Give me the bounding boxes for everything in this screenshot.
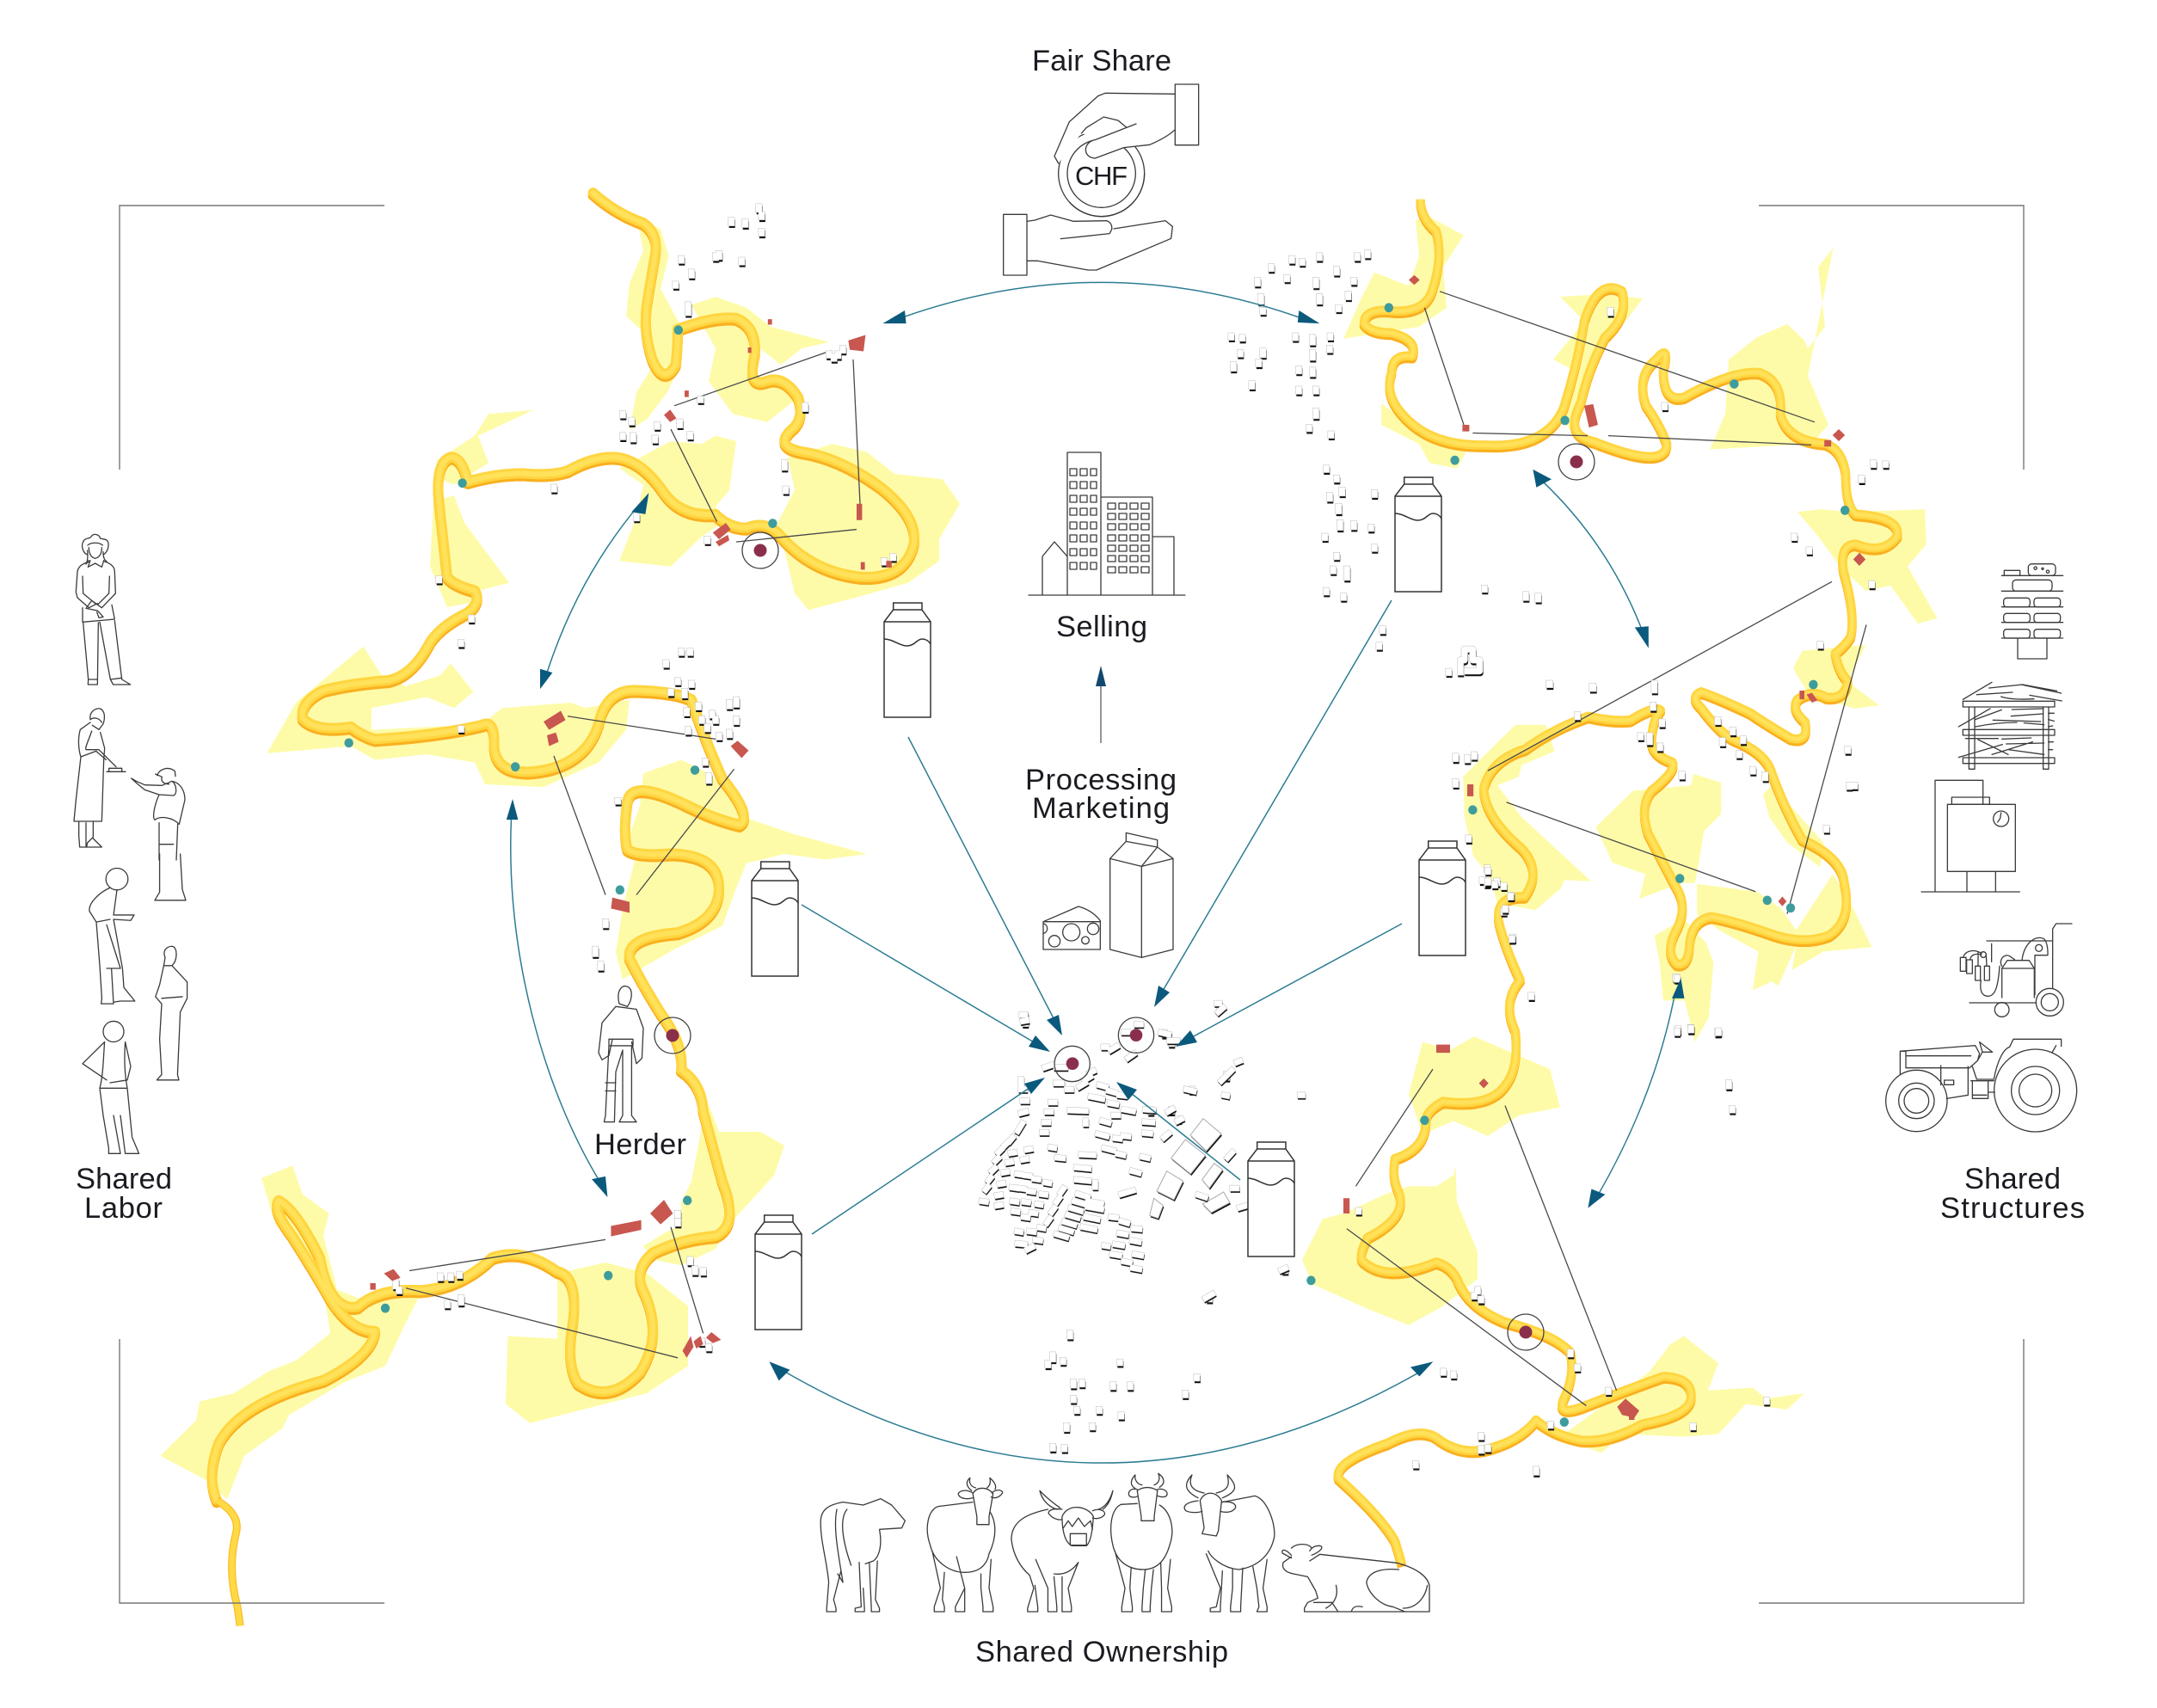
cow: front view four [1111, 1473, 1172, 1612]
milk cartons [752, 477, 1466, 1330]
person: man with cap [132, 769, 185, 860]
village: houses [982, 1004, 1303, 1299]
curved double arrows between alp groups [507, 282, 1684, 1463]
valley dairy locations: maroon dots with rings [654, 444, 1595, 1350]
label: Herder: Herder [594, 1128, 686, 1161]
map background: yellow pasture areas [160, 215, 1937, 1499]
cow: rear view [820, 1499, 905, 1612]
cow: front view five [1184, 1475, 1275, 1612]
label: Selling: Selling [1056, 611, 1147, 643]
label: Labor: Labor [84, 1192, 163, 1225]
icon group: cattle [820, 1473, 1429, 1612]
cow: lying [1282, 1545, 1429, 1612]
persons: lower group [83, 854, 187, 1153]
icon: city buildings [1029, 452, 1185, 595]
red alp buildings [370, 275, 1865, 1420]
person: herder [599, 986, 643, 1122]
frame brackets [120, 206, 2024, 1603]
cow: front view two [927, 1478, 1003, 1612]
icon: tractor [1886, 1039, 2077, 1132]
cow: highland [1011, 1490, 1113, 1612]
village dairy markers [1054, 1017, 1154, 1082]
label: Structures: Structures [1940, 1192, 2085, 1225]
pasture: upper right [1343, 215, 1937, 1042]
label: Shared Ownership: Shared Ownership [975, 1636, 1228, 1668]
icon: wooden rack [1958, 682, 2062, 769]
icon: cheese and milk carton [1043, 832, 1173, 957]
river route: east valley [1338, 200, 1897, 1567]
heading: Fair Share: Fair Share [1032, 45, 1171, 77]
icon: milking machine [1960, 924, 2072, 1017]
icon: fair share hands and coin [1004, 84, 1199, 275]
icon group: shared structures [1886, 564, 2077, 1132]
white farm buildings [396, 207, 1886, 1474]
straight arrows: milk to village dairies [802, 600, 1402, 1234]
village: large buildings [1150, 1119, 1231, 1220]
teal alp markers [344, 303, 1849, 1427]
arrow: processing to selling [1096, 666, 1106, 743]
central village [982, 1004, 1303, 1299]
pasture: lower right [1302, 1036, 1804, 1453]
label: Processing: Processing [1025, 764, 1177, 796]
pasture: lower left [160, 1104, 784, 1499]
label: Marketing: Marketing [1032, 792, 1170, 825]
icon: boiler [1921, 780, 2019, 892]
label: Shared (structures): Shared [1964, 1163, 2061, 1195]
label: Shared: Shared [76, 1163, 172, 1195]
person: woman with hat [76, 534, 131, 685]
pasture: upper left [267, 218, 960, 980]
icon: cheese shelves [2001, 564, 2063, 659]
person: woman in apron [74, 709, 126, 847]
icon group: shared labor people [74, 534, 187, 1153]
river route: west valley [212, 193, 914, 1625]
label: CHF: CHF [1075, 161, 1128, 191]
connector lines between alps [406, 292, 1866, 1406]
